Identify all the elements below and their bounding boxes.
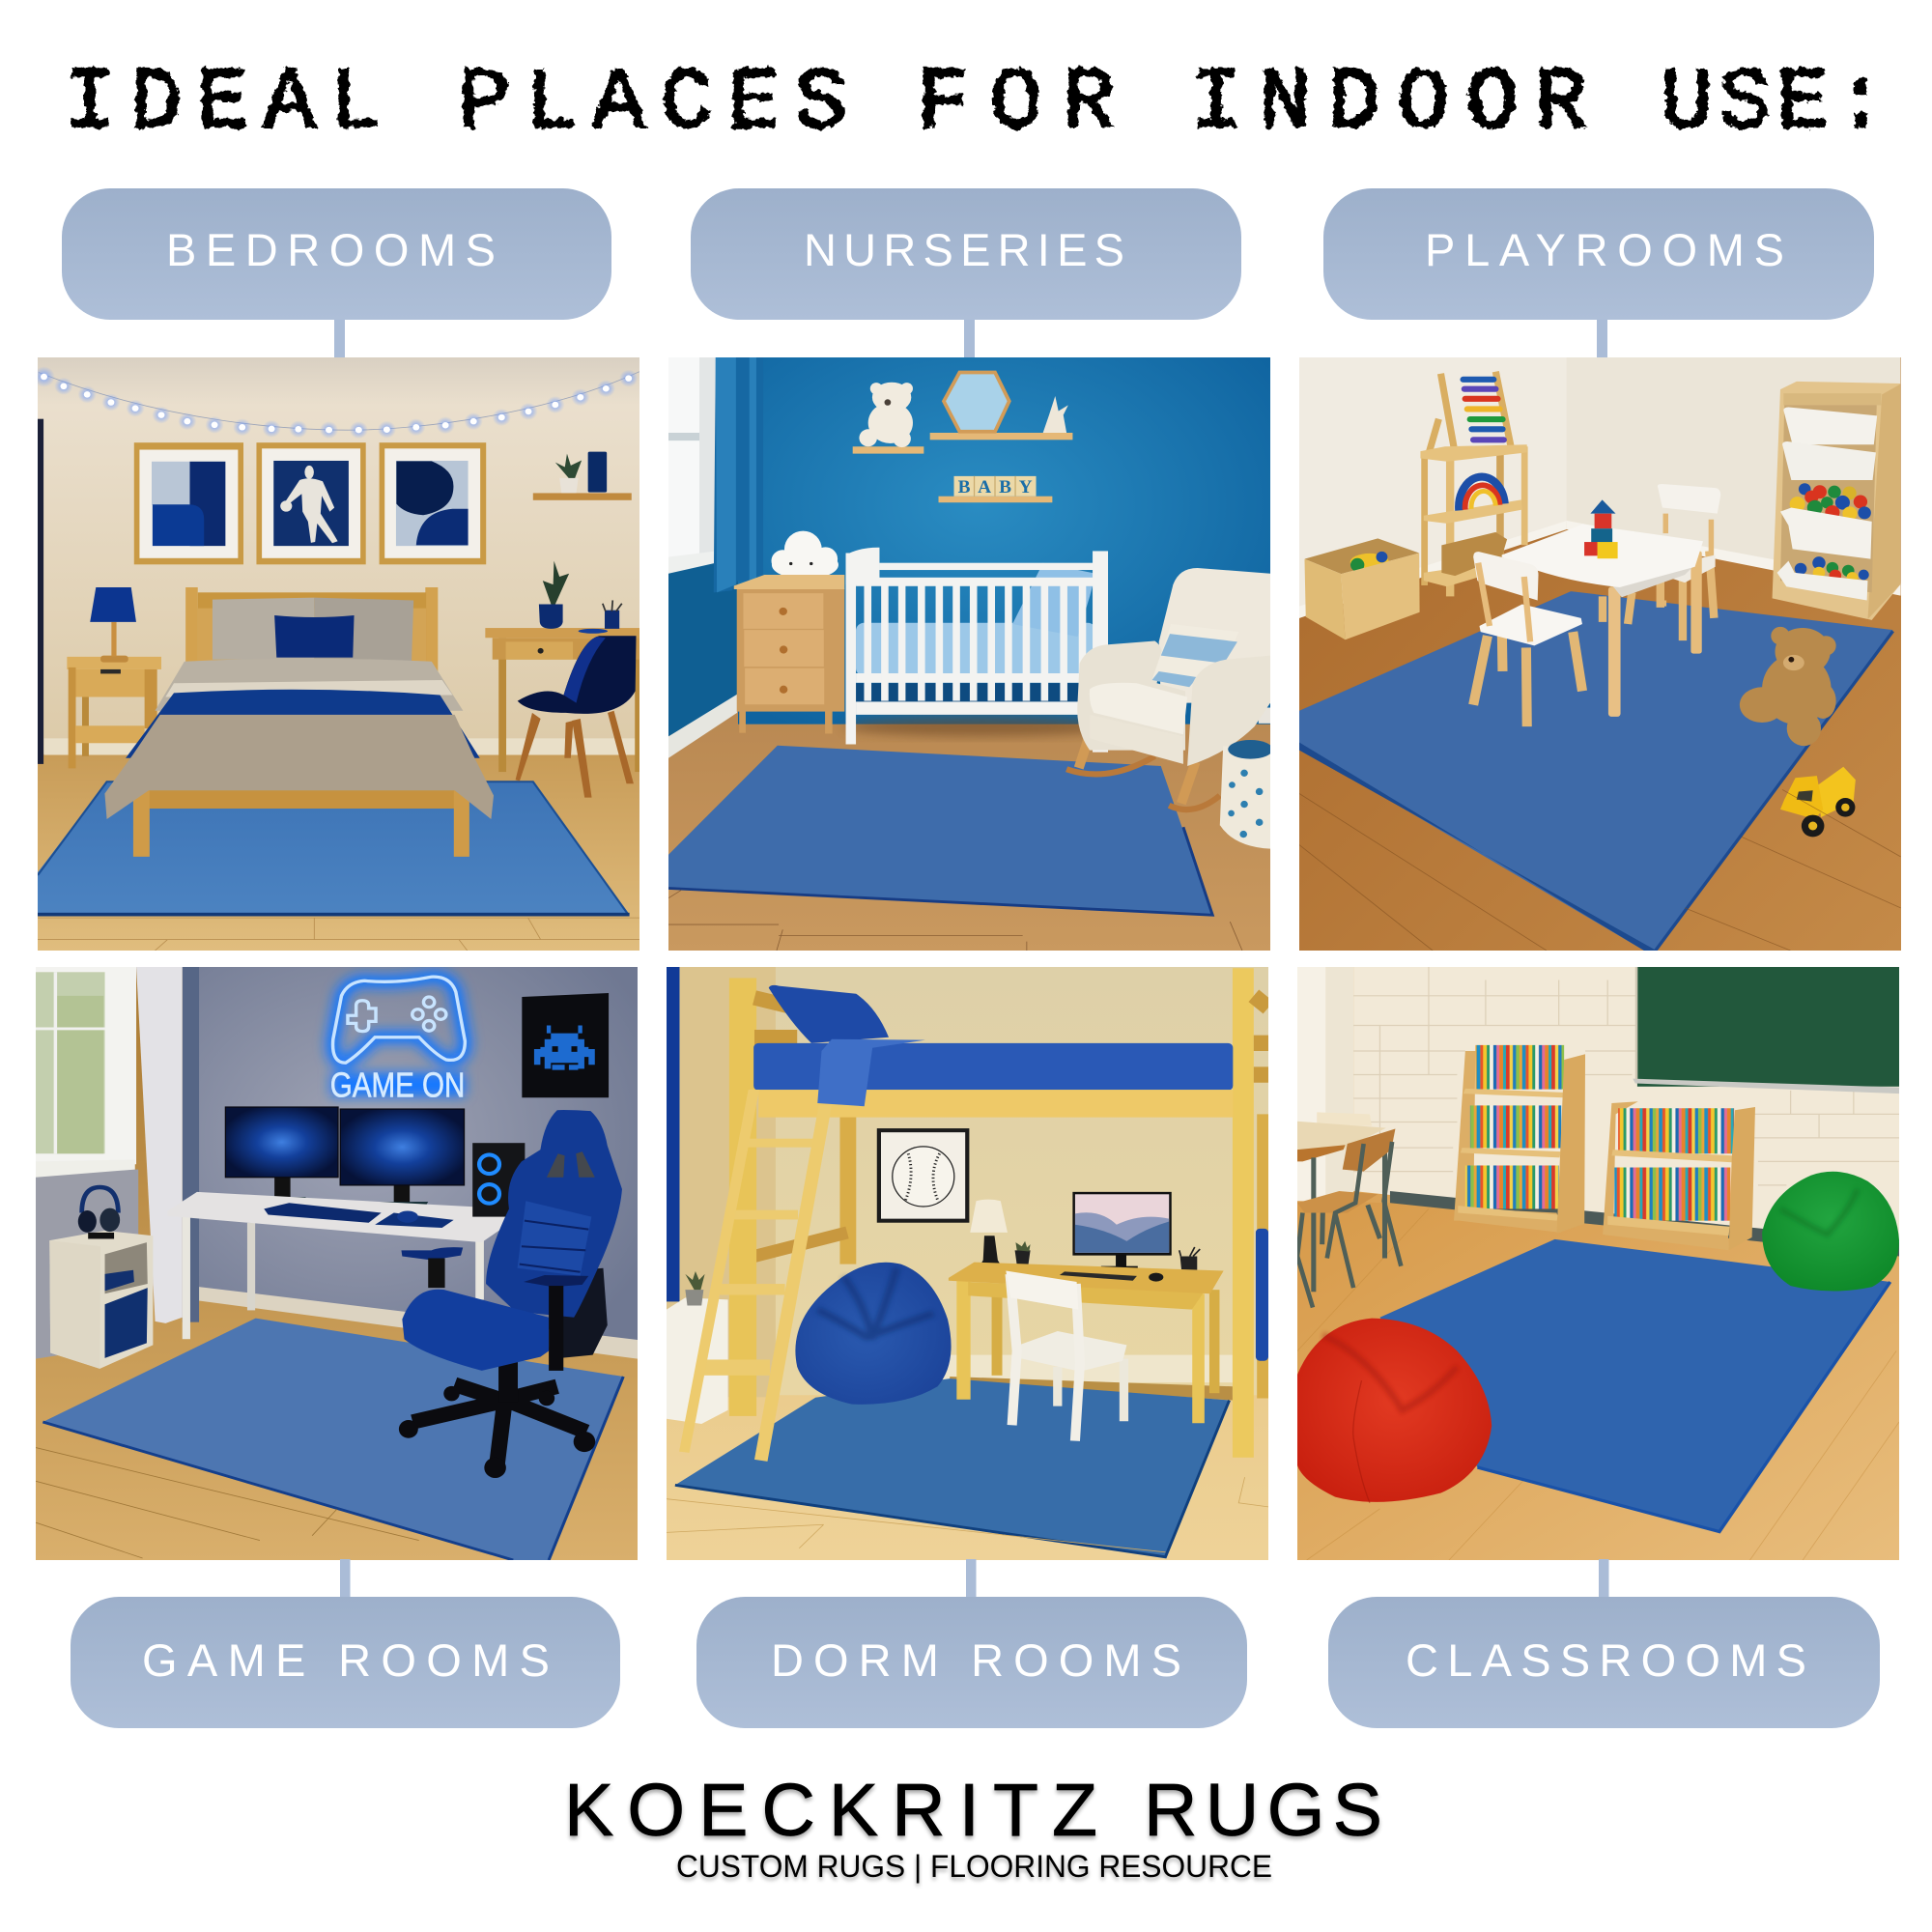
tagline: CUSTOM RUGS | FLOORING RESOURCE <box>676 1849 1272 1884</box>
label: bedrooms <box>62 188 611 357</box>
label: classrooms: CLASSROOMS <box>1406 1634 1806 1686</box>
baby blocks: B <box>958 477 971 497</box>
desk with plant <box>485 561 639 772</box>
desk <box>949 1263 1224 1423</box>
panel: game room photo <box>36 967 638 1560</box>
window <box>668 357 716 574</box>
label: nurseries: NURSERIES <box>804 224 1124 275</box>
baby blocks: A <box>978 477 991 497</box>
pixel invader poster <box>522 993 609 1097</box>
abacus <box>1430 372 1511 454</box>
loft bed <box>729 968 1268 1458</box>
title <box>64 55 1887 154</box>
hexagon frame <box>944 373 1009 432</box>
label: nurseries <box>691 188 1241 357</box>
rug <box>1299 591 1893 951</box>
teddy bear <box>1740 627 1836 746</box>
white cabinet and plant <box>667 1271 728 1424</box>
wooden toy crate <box>1304 538 1420 639</box>
bunny figure <box>1043 396 1068 433</box>
baby blocks: B <box>999 477 1011 497</box>
storage unit with bins <box>1773 382 1900 620</box>
toy dump truck <box>1780 767 1856 837</box>
title: PLACES <box>458 55 847 154</box>
baby blocks <box>954 476 1037 497</box>
right bookshelf <box>1603 1101 1755 1250</box>
title: IDEAL <box>64 55 382 154</box>
baby blocks: Y <box>1019 477 1033 497</box>
red bean bag <box>1297 1319 1492 1503</box>
crib <box>846 548 1108 753</box>
panel: playroom photo <box>1299 357 1901 951</box>
wall shelf with plant <box>533 452 632 500</box>
title: FOR <box>917 55 1115 154</box>
bed <box>104 587 494 857</box>
dual monitors <box>225 1107 465 1210</box>
neon controller sign: GAME ON <box>330 1065 465 1104</box>
toy blocks tower <box>1584 499 1618 558</box>
label: dorm rooms <box>696 1559 1247 1728</box>
label: game rooms <box>71 1559 620 1728</box>
label: game rooms: GAME ROOMS <box>142 1634 550 1686</box>
baseball art <box>877 1128 969 1223</box>
brand name <box>564 1769 1382 1852</box>
PC tower <box>472 1143 525 1217</box>
front chair <box>1473 552 1582 726</box>
framed art: basketball player <box>256 442 366 564</box>
title: USE: <box>1661 55 1887 154</box>
desk items <box>1015 1241 1200 1272</box>
rug <box>43 1319 623 1560</box>
label: classrooms <box>1328 1559 1880 1728</box>
wall shelves <box>853 433 1072 502</box>
panel: dorm room photo <box>667 967 1268 1560</box>
rocking chair <box>1066 568 1270 810</box>
table and chairs <box>1297 1112 1401 1308</box>
brand name: KOECKRITZ <box>564 1769 1097 1852</box>
teddy bear on shelf <box>859 383 913 447</box>
curtain <box>714 357 763 592</box>
rug <box>38 781 630 916</box>
label: dorm rooms: DORM ROOMS <box>771 1634 1181 1686</box>
chalkboard <box>1633 967 1899 1094</box>
open shelf <box>1420 444 1528 596</box>
dresser <box>734 575 844 733</box>
kids table and chairs <box>1502 484 1720 717</box>
window <box>36 967 136 1178</box>
panel: bedroom photo <box>38 357 639 951</box>
left bookshelf <box>1454 1045 1585 1234</box>
side cabinet with headphones <box>49 1187 153 1369</box>
label: playrooms <box>1323 188 1874 357</box>
panel: classroom photo <box>1297 967 1899 1560</box>
green bean bag <box>1762 1172 1899 1292</box>
string lights <box>33 366 639 439</box>
label: bedrooms: BEDROOMS <box>166 224 496 275</box>
panel: nursery photo <box>668 357 1270 951</box>
title: INDOOR <box>1190 55 1587 154</box>
rug <box>675 1378 1230 1557</box>
cloud lamp <box>771 531 838 579</box>
curtain <box>136 967 183 1323</box>
desk lamp <box>970 1200 1008 1264</box>
rug <box>668 717 1212 916</box>
gaming chair <box>399 1110 622 1478</box>
brand name: RUGS <box>1144 1769 1382 1852</box>
nightstand and lamp <box>67 587 161 768</box>
gaming desk <box>168 1192 513 1339</box>
white chair <box>1006 1271 1126 1441</box>
framed art: circles <box>380 442 486 564</box>
bean bag <box>795 1263 952 1405</box>
monitor <box>1072 1192 1172 1271</box>
framed art: abstract blocks <box>134 442 243 564</box>
ladder <box>679 1090 832 1462</box>
polka dot basket <box>1220 740 1273 849</box>
rug <box>1379 1239 1890 1532</box>
neon controller sign <box>330 977 465 1104</box>
desk chair <box>516 636 637 798</box>
label: playrooms: PLAYROOMS <box>1425 224 1784 275</box>
